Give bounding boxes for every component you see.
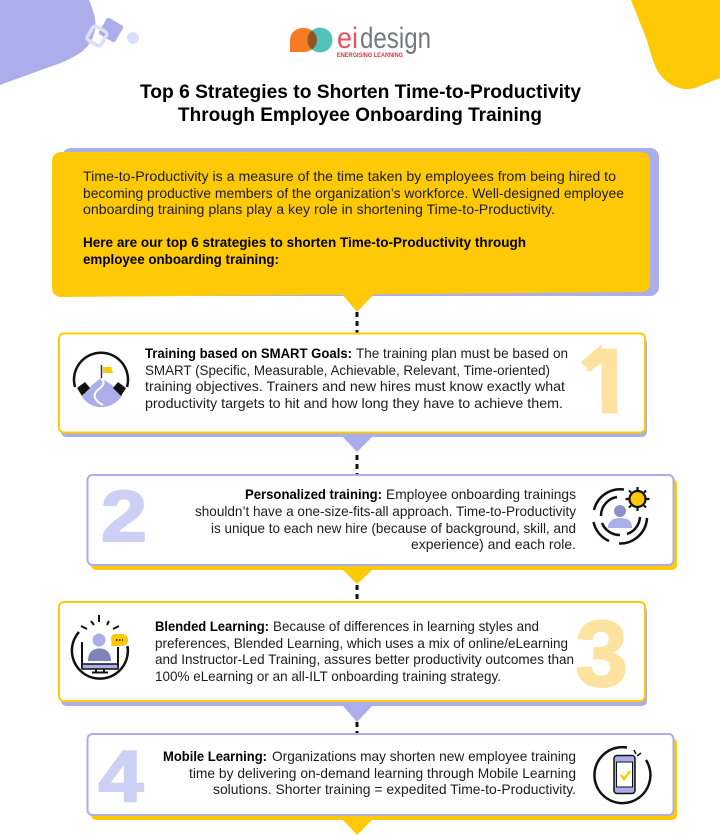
logo: eidesign: ENERGISING LEARNING [337,52,403,59]
panel: strategy 4 [88,734,677,835]
number 1: 1 [582,332,632,432]
connector: intro to card 1 [356,312,358,333]
logo: eidesign: design [360,22,431,55]
title: Through Employee Onboarding Training [178,104,542,126]
title: Top 6 Strategies to Shorten Time-to-Productivity [140,81,581,103]
intro text: onboarding training plans play a key role in shortening Time-to-Productivity. [83,202,555,217]
strategy 4 text: Mobile Learning: [163,749,267,764]
decorative blob: lilac top left [0,0,139,85]
number 3: 3 [576,601,628,706]
strategy 2 text: Employee onboarding trainings [386,487,576,502]
strategy 1 text: Training based on SMART Goals: [145,346,352,361]
strategy 2 text [195,487,576,552]
logo: eidesign [290,22,431,59]
connector: card 1 to card 2 [356,455,358,475]
title [140,81,581,126]
strategy 2 text: Personalized training: [245,487,382,502]
strategy 3 text: 100% eLearning or an all-ILT onboarding training strategy. [155,669,501,684]
strategy 1 text [145,346,568,411]
strategy 3 text: and Instructor-Led Training, assures better productivity outcomes than [155,652,574,667]
connector: card 2 to card 3 [356,585,358,602]
strategy 3 text: Because of differences in learning styles and [273,619,539,634]
panel: strategy 3 [59,601,647,722]
icon: phone with check [594,747,650,803]
strategy 4 text: solutions. Shorter training = expedited Time-to-Productivity. [213,782,576,797]
intro text: becoming productive members of the organization’s workforce. Well-designed employee [83,186,624,201]
logo: eidesign: ei [337,22,358,55]
strategy 3 text [155,619,574,684]
panel: strategy 2 [88,475,677,584]
strategy 2 text: experience) and each role. [411,537,576,552]
intro text: Time-to-Productivity is a measure of the time taken by employees from being hired to [83,169,616,184]
intro text: employee onboarding training: [83,252,279,267]
icon: mountain with flag [74,353,128,407]
strategy 4 text: Organizations may shorten new employee training [272,749,576,764]
strategy 4 text [163,749,576,797]
panel: intro [52,148,659,312]
strategy 1 text: productivity targets to hit and how long they have to achieve them. [145,396,563,411]
number 2: 2 [101,477,147,557]
intro text: Here are our top 6 strategies to shorten Time-to-Productivity through [83,235,526,250]
number 4: 4 [98,737,144,817]
icon: monitor with person [72,615,128,679]
strategy 3 text: preferences, Blended Learning, which uses a mix of online/eLearning [155,636,568,651]
decorative blob: yellow top right [631,0,720,89]
icon: person with gear [594,487,650,544]
strategy 3 text: Blended Learning: [155,619,269,634]
strategy 1 text: SMART (Specific, Measurable, Achievable, Relevant, Time-oriented) [145,363,550,378]
connector: card 3 to card 4 [356,722,358,734]
strategy 2 text: shouldn’t have a one-size-fits-all approach. Time-to-Productivity [195,504,576,519]
strategy 1 text: training objectives. Trainers and new hires must know exactly what [145,379,565,394]
panel: strategy 1 [59,332,647,452]
intro text [83,169,624,267]
strategy 1 text: The training plan must be based on [356,346,568,361]
strategy 2 text: is unique to each new hire (because of background, skill, and [211,521,576,536]
strategy 4 text: time by delivering on-demand learning through Mobile Learning [189,766,576,781]
